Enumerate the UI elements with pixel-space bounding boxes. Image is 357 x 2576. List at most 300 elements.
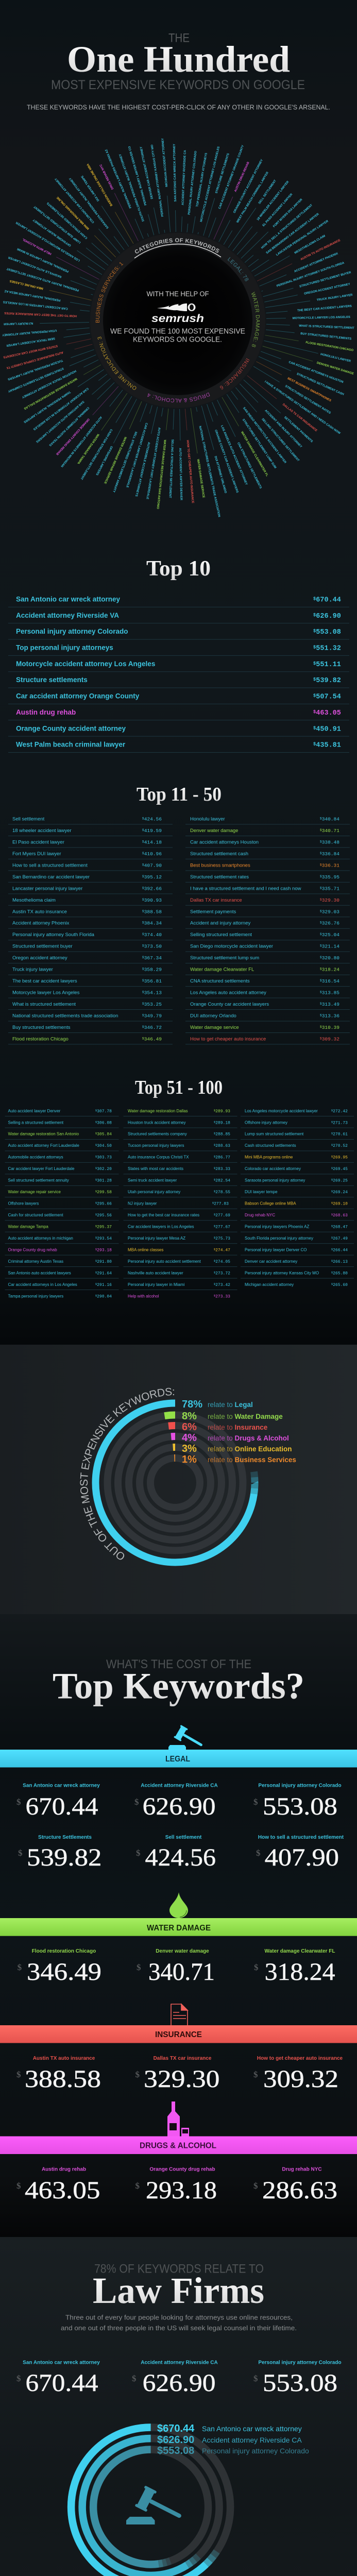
- water damage stats: Water damage Clearwater FL: [265, 1948, 335, 1954]
- water damage stats: 346.49: [27, 1958, 101, 1986]
- category ring labels: DRUGS & ALCOHOL: 4: [147, 393, 210, 403]
- chart legend: relate to Business Services: [208, 1456, 296, 1464]
- chart legend: 1%: [182, 1454, 197, 1465]
- column one, ranks 11 to 30: $353.25: [142, 1002, 162, 1007]
- legal stats: 553.08: [263, 1793, 337, 1820]
- column two, ranks 31 to 50: $340.84: [320, 816, 339, 822]
- legal stats: 626.90: [143, 1793, 216, 1820]
- column three, ranks 85 to 100: Cash structured settlements: [245, 1143, 296, 1148]
- radial keywords: THE BEST CAR ACCIDENT LAWYERS: [297, 305, 352, 313]
- band label: insurance: INSURANCE: [155, 2030, 202, 2039]
- radial keywords: DUI ATTORNEY ORLANDO: [214, 456, 227, 494]
- column two, ranks 31 to 50: Denver water damage: [190, 828, 238, 834]
- radial keywords: MBA ONLINE CLASSES: [9, 279, 44, 290]
- ring legend: Personal injury attorney Colorado: [202, 2447, 309, 2455]
- column two, ranks 68 to 84: States with most car accidents: [128, 1166, 183, 1171]
- column three, ranks 85 to 100: $268.47: [331, 1225, 348, 1229]
- insurance stats: $: [16, 2070, 21, 2079]
- column three, ranks 85 to 100: $269.95: [331, 1156, 348, 1160]
- table: top 11 to 50: [12, 784, 339, 1045]
- ring legend: $626.90: [157, 2434, 194, 2446]
- column two, ranks 68 to 84: [128, 1109, 230, 1299]
- drugs and alcohol stats: 286.63: [262, 2177, 337, 2204]
- column one, ranks 51 to 67: $301.28: [95, 1179, 112, 1183]
- top law keyword stats: Personal injury attorney Colorado: [258, 2360, 342, 2366]
- radial keywords: PERSONAL INJURY LAWYER MESA AZ: [4, 289, 61, 301]
- radial keywords: UTAH PERSONAL INJURY ATTORNEY: [2, 329, 57, 336]
- radial keywords: MOTORCYCLE ACCIDENT ATTORNEY LOS ANGELES: [200, 146, 220, 223]
- column one, ranks 11 to 30: $367.34: [142, 955, 162, 961]
- subheading: MOST EXPENSIVE KEYWORDS ON GOOGLE: [51, 78, 305, 92]
- top 10 rows: $626.90: [313, 613, 341, 620]
- radial keywords: ACCIDENT ATTORNEY RIVERSIDE CA: [181, 149, 187, 206]
- column one, ranks 11 to 30: $424.56: [142, 816, 162, 822]
- column three, ranks 85 to 100: $270.61: [331, 1132, 348, 1137]
- band label: legal: LEGAL: [165, 1755, 190, 1764]
- radial keywords: CAR ACCIDENT LAWYERS IN LOS ANGELES: [3, 300, 68, 310]
- drugs and alcohol stats: $: [16, 2181, 21, 2191]
- radial keywords: ORANGE COUNTY ACCIDENT ATTORNEY: [233, 159, 264, 214]
- column three, ranks 85 to 100: DUI lawyer tempe: [245, 1190, 278, 1194]
- column one, ranks 11 to 30: $390.93: [142, 897, 162, 903]
- column two, ranks 31 to 50: Water damage service: [190, 1025, 239, 1030]
- radial keywords: HOW TO SELL A STRUCTURED SETTLEMENT: [261, 204, 313, 250]
- radial keywords: SETTLEMENT PAYMENTS: [283, 416, 313, 444]
- column one, ranks 11 to 30: $354.13: [142, 990, 162, 996]
- radial keywords: MINI MBA PROGRAMS ONLINE: [56, 196, 90, 230]
- column two, ranks 68 to 84: Personal injury lawyer in Miami: [128, 1282, 184, 1287]
- band: legal: [0, 1750, 357, 1767]
- radial keywords: 18 WHEELER ACCIDENT LAWYER: [257, 180, 290, 222]
- radial keywords: TRUCK INJURY LAWYER: [316, 294, 353, 302]
- column one, ranks 51 to 67: Tampa personal injury lawyers: [8, 1294, 63, 1298]
- radial keywords: WATER DAMAGE CLEARWATER FL: [240, 431, 268, 478]
- radial keywords: STATES WITH MOST CAR ACCIDENTS: [3, 344, 58, 359]
- column two, ranks 68 to 84: $288.63: [214, 1144, 230, 1148]
- legal stats: $: [256, 1848, 261, 1858]
- radial keywords: [2, 138, 354, 517]
- category ring labels: LEGAL: 78: [228, 257, 248, 281]
- top 10 rows: $450.91: [313, 725, 341, 733]
- top 10 rows: $463.05: [313, 709, 341, 717]
- column one, ranks 51 to 67: $291.16: [95, 1283, 112, 1287]
- radial keywords: TAMPA PERSONAL INJURY LAWYERS: [23, 390, 71, 423]
- radial keywords: SOUTH FLORIDA PERSONAL INJURY ATTORNEY: [119, 154, 145, 222]
- radial keywords: TOP PERSONAL INJURY ATTORNEYS: [196, 152, 208, 207]
- chart legend: relate to Drugs & Alcohol: [208, 1434, 289, 1442]
- radial keywords: CASH FOR STRUCTURED SETTLEMENT: [79, 428, 113, 480]
- drugs and alcohol stats: Orange County drug rehab: [149, 2167, 215, 2172]
- category ring labels: ONLINE EDUCATION: 3: [98, 337, 136, 390]
- column one, ranks 51 to 67: Cash for structured settlement: [8, 1213, 63, 1217]
- radial keywords: WEST PALM BEACH CRIMINAL LAWYER: [236, 171, 269, 224]
- column two, ranks 68 to 84: $289.18: [214, 1121, 230, 1125]
- legal stats: $: [134, 1797, 139, 1807]
- radial keywords: LUMP SUM STRUCTURED SETTLEMENT: [33, 205, 81, 244]
- radial keywords: NJ INJURY LAWYER: [3, 321, 33, 325]
- radial keywords: STRUCTURED SETTLEMENTS COMPANY: [7, 366, 64, 393]
- radial keywords: SEMI TRUCK ACCIDENT LAWYER: [6, 336, 55, 347]
- radial keywords: COLORADO CAR ACCIDENT ATTORNEY: [55, 177, 95, 224]
- radial keywords: WATER DAMAGE REPAIR SERVICE: [103, 436, 127, 484]
- section overline: WHAT'S THE COST OF THE: [106, 1657, 251, 1671]
- column two, ranks 31 to 50: San Diego motorcycle accident lawyer: [190, 944, 273, 950]
- section overline: 78% OF KEYWORDS RELATE TO: [94, 2262, 264, 2276]
- coloured ring arcs: [96, 1403, 254, 1562]
- band: water damage: [0, 1918, 357, 1936]
- column one, ranks 51 to 67: $293.18: [95, 1248, 112, 1252]
- column two, ranks 68 to 84: $288.85: [214, 1132, 230, 1137]
- column one, ranks 11 to 30: Oregon accident attorney: [12, 955, 67, 961]
- column one, ranks 51 to 67: Sell structured settlement annuity: [8, 1178, 69, 1183]
- radial keywords: OFFSHORE LAWYERS: [95, 445, 113, 476]
- column one, ranks 51 to 67: $306.08: [95, 1121, 112, 1125]
- top 10 rows: Orange County accident attorney: [16, 724, 126, 732]
- water damage stats: $: [137, 1962, 141, 1972]
- water damage stats: Denver water damage: [156, 1948, 209, 1954]
- column one, ranks 51 to 67: $305.84: [95, 1132, 112, 1137]
- insurance stats: 388.58: [25, 2065, 101, 2093]
- column one, ranks 51 to 67: $295.66: [95, 1202, 112, 1207]
- radial keywords: SELLING A STRUCTURED SETTLEMENT: [168, 439, 174, 498]
- column two, ranks 68 to 84: Houston truck accident attorney: [128, 1120, 186, 1125]
- radial keywords: PERSONAL INJURY LAWYER IN MIAMI: [16, 247, 70, 273]
- top law keyword stats: [16, 2360, 342, 2397]
- column two, ranks 31 to 50: $310.39: [320, 1025, 339, 1030]
- column two, ranks 31 to 50: Selling structured settlement: [190, 932, 252, 938]
- column three, ranks 85 to 100: Babson College online MBA: [245, 1201, 296, 1206]
- ring legend: $553.08: [157, 2445, 194, 2456]
- top 10 rows: Car accident attorney Orange County: [16, 692, 140, 700]
- water damage stats: $: [254, 1962, 259, 1972]
- column three, ranks 85 to 100: $269.10: [331, 1202, 348, 1207]
- chart legend: [182, 1399, 296, 1465]
- column two, ranks 31 to 50: Settlement payments: [190, 909, 236, 914]
- centre text: found keywords: WE FOUND THE 100 MOST EXPENSIVE: [110, 327, 245, 336]
- radial keywords: TUCSON PERSONAL INJURY LAWYERS: [7, 359, 63, 381]
- chart legend: relate to Legal: [208, 1401, 253, 1409]
- top law keyword stats: 626.90: [143, 2369, 216, 2397]
- column two, ranks 31 to 50: $335.71: [320, 886, 339, 891]
- column two, ranks 31 to 50: $338.48: [320, 839, 339, 845]
- radial keywords: I HAVE A STRUCTURED SETTLEMENT AND I NEED CASH NOW: [264, 380, 341, 435]
- column three, ranks 85 to 100: $269.24: [331, 1190, 348, 1195]
- legal stats: 670.44: [26, 1793, 98, 1820]
- top 10 rows: $670.44: [313, 596, 341, 604]
- column one, ranks 11 to 30: $358.29: [142, 967, 162, 973]
- column one, ranks 51 to 67: $302.20: [95, 1167, 112, 1172]
- legal stats: San Antonio car wreck attorney: [23, 1783, 100, 1789]
- top 10 rows: Motorcycle accident attorney Los Angeles: [16, 660, 155, 668]
- radial keywords: AUTO INSURANCE CORPUS CHRISTI TX: [6, 350, 63, 369]
- column one, ranks 51 to 67: Car accident lawyer Fort Lauderdale: [8, 1166, 75, 1171]
- column three, ranks 85 to 100: $271.73: [331, 1121, 348, 1125]
- column one, ranks 11 to 30: Austin TX auto insurance: [12, 909, 67, 914]
- column two, ranks 68 to 84: $277.67: [214, 1225, 230, 1229]
- column two, ranks 31 to 50: Los Angeles auto accident attorney: [190, 990, 266, 996]
- table: top 51 to 100: [8, 1077, 348, 1301]
- chart legend: 4%: [182, 1432, 197, 1444]
- column three, ranks 85 to 100: $266.13: [331, 1260, 348, 1264]
- column two, ranks 68 to 84: $277.69: [214, 1213, 230, 1218]
- radial keywords: DRUG REHAB NYC: [99, 163, 114, 190]
- column two, ranks 68 to 84: MBA online classes: [128, 1247, 163, 1252]
- column two, ranks 68 to 84: Water damage restoration Dallas: [128, 1109, 188, 1113]
- column two, ranks 68 to 84: Personal injury lawyer Mesa AZ: [128, 1236, 185, 1241]
- top 10 rows: $539.82: [313, 677, 341, 685]
- radial keywords: PERSONAL INJURY ATTORNEY COLORADO: [188, 150, 198, 215]
- column two, ranks 31 to 50: $320.80: [320, 955, 339, 961]
- column one, ranks 11 to 30: San Bernardino car accident lawyer: [12, 874, 90, 880]
- radial keywords: WHAT IS STRUCTURED SETTLEMENT: [299, 325, 354, 330]
- insurance stats: Dallas TX car insurance: [154, 2056, 212, 2061]
- column three, ranks 85 to 100: Denver car accident attorney: [245, 1259, 297, 1264]
- curved ring caption: OUT OF THE MOST EXPENSIVE KEYWORDS:: [80, 1388, 174, 1560]
- legal stats: $: [18, 1848, 23, 1858]
- column two, ranks 31 to 50: Best business smartphones: [190, 862, 250, 868]
- column two, ranks 31 to 50: Orange County car accident lawyers: [190, 1002, 269, 1007]
- column one, ranks 11 to 30: $388.58: [142, 909, 162, 914]
- radial keywords: WATER DAMAGE RESTORATION SAN ANTONIO: [156, 439, 166, 510]
- centre logo: semrush: semrush: [151, 313, 204, 325]
- drugs and alcohol stats: 463.05: [25, 2177, 100, 2204]
- category ring labels: WATER DAMAGE: 8: [251, 292, 260, 347]
- column two, ranks 31 to 50: How to get cheaper auto insurance: [190, 1036, 266, 1042]
- top 10 rows: $551.11: [313, 661, 341, 669]
- radial keywords: LOS ANGELES MOTORCYCLE ACCIDENT LAWYER: [15, 221, 80, 262]
- column three, ranks 85 to 100: Lump sum structured settlement: [245, 1132, 304, 1137]
- radial keywords: PERSONAL INJURY ATTORNEY SOUTH FLORIDA: [276, 261, 345, 288]
- column two, ranks 31 to 50: $325.04: [320, 932, 339, 938]
- column one, ranks 11 to 30: Truck injury lawyer: [12, 967, 53, 973]
- paragraph: [61, 2313, 297, 2332]
- radial keywords: HONOLULU LAWYER: [320, 353, 351, 363]
- water damage stats: 318.24: [265, 1958, 335, 1986]
- radial keywords: SAN ANTONIO CAR WRECK ATTORNEY: [173, 144, 177, 202]
- top law keyword stats: 553.08: [263, 2369, 337, 2397]
- column one, ranks 51 to 67: $295.56: [95, 1213, 112, 1218]
- heading: one hundred: One Hundred: [67, 39, 290, 80]
- column one, ranks 11 to 30: $346.49: [142, 1036, 162, 1042]
- column two, ranks 31 to 50: Structured settlement rates: [190, 874, 249, 880]
- ring legend: $670.44: [157, 2423, 195, 2434]
- column one, ranks 11 to 30: National structured settlements trade association: [12, 1013, 118, 1019]
- radial keywords: MESOTHELIOMA CLAIM: [294, 234, 326, 255]
- drugs and alcohol stats: $: [253, 2181, 258, 2191]
- column one, ranks 51 to 67: $307.78: [95, 1109, 112, 1114]
- column one, ranks 51 to 67: Water damage repair service: [8, 1190, 61, 1194]
- column two, ranks 68 to 84: How to get the best car insurance rates: [128, 1213, 199, 1217]
- column one, ranks 51 to 67: Automobile accident attorneys: [8, 1155, 63, 1160]
- column one, ranks 11 to 30: $410.96: [142, 851, 162, 857]
- column two, ranks 68 to 84: $273.72: [214, 1271, 230, 1276]
- radial keywords: SELLING STRUCTURED SETTLEMENT: [261, 418, 300, 462]
- column one, ranks 11 to 30: The best car accident lawyers: [12, 978, 77, 984]
- column one, ranks 11 to 30: $395.12: [142, 874, 162, 880]
- chart legend: relate to Insurance: [208, 1423, 268, 1431]
- column one, ranks 11 to 30: Lancaster personal injury lawyer: [12, 886, 82, 891]
- radial keywords: CRIMINAL ATTORNEY AUSTIN TEXAS: [48, 406, 90, 447]
- table: top 10: [16, 557, 341, 753]
- column one, ranks 11 to 30: Structured settlement buyer: [12, 944, 73, 950]
- column one, ranks 11 to 30: $414.18: [142, 839, 162, 845]
- icon: gavel: [168, 1725, 206, 1752]
- radial keywords: CNA STRUCTURED SETTLEMENTS: [236, 442, 262, 489]
- category ring labels: CATEGORIES OF KEYWORDS: [135, 238, 219, 253]
- column two, ranks 68 to 84: $289.93: [214, 1109, 230, 1114]
- column two, ranks 31 to 50: $321.14: [320, 944, 339, 950]
- column one, ranks 51 to 67: $295.37: [95, 1225, 112, 1229]
- column one, ranks 51 to 67: [8, 1109, 112, 1299]
- top 10 rows: $435.81: [313, 741, 341, 750]
- radial keywords: CASH STRUCTURED SETTLEMENTS: [46, 201, 88, 240]
- column three, ranks 85 to 100: Drug rehab NYC: [245, 1213, 275, 1217]
- legal stats: Sell settlement: [165, 1835, 202, 1840]
- column three, ranks 85 to 100: Michigan accident attorney: [245, 1282, 294, 1287]
- radial keywords: DUI LAWYER TEMPE: [81, 175, 100, 201]
- top law keyword stats: Accident attorney Riverside CA: [141, 2360, 218, 2366]
- chart: radial keyword categories: [2, 138, 354, 517]
- radial keywords: LOS ANGELES AUTO ACCIDENT ATTORNEY: [220, 425, 248, 486]
- column two, ranks 68 to 84: $286.77: [214, 1156, 230, 1160]
- icon: insurance document: [171, 2004, 188, 2025]
- column two, ranks 31 to 50: CNA structured settlements: [190, 978, 250, 984]
- column two, ranks 68 to 84: Structured settlements company: [128, 1132, 187, 1137]
- top law keyword stats: $: [16, 2374, 21, 2383]
- white arc under categories title: [134, 244, 221, 258]
- column one, ranks 11 to 30: El Paso accident lawyer: [12, 839, 64, 845]
- radial keywords: STRUCTURED SETTLEMENT LUMP SUM: [242, 418, 277, 469]
- column one, ranks 11 to 30: How to sell a structured settlement: [12, 862, 88, 868]
- column three, ranks 85 to 100: $266.44: [331, 1248, 348, 1252]
- radial keywords: MICHIGAN ACCIDENT ATTORNEY: [161, 138, 168, 187]
- radial keywords: FLOOD RESTORATION CHICAGO: [305, 341, 354, 352]
- column three, ranks 85 to 100: Personal injury lawyers Phoenix AZ: [245, 1224, 310, 1229]
- column one, ranks 11 to 30: $392.66: [142, 886, 162, 891]
- radial keywords: SELL SETTLEMENT: [258, 179, 277, 205]
- radial keywords: NASHVILLE AUTO ACCIDENT LAWYER: [8, 256, 62, 278]
- radial keywords: MOTORCYCLE LAWYER LOS ANGELES: [293, 316, 350, 320]
- chart legend: relate to Online Education: [208, 1445, 292, 1453]
- drugs and alcohol stats: 293.18: [146, 2177, 217, 2204]
- column three, ranks 85 to 100: Sarasota personal injury attorney: [245, 1178, 305, 1183]
- radial keywords: WATER DAMAGE SERVICE: [196, 459, 205, 498]
- column two, ranks 31 to 50: Water damage Clearwater FL: [190, 967, 254, 973]
- legal stats: $: [136, 1848, 141, 1858]
- panel: intro and keyword lists background: [0, 0, 357, 1345]
- column one, ranks 11 to 30: [12, 816, 162, 1042]
- top 10 rows: Accident attorney Riverside VA: [16, 612, 119, 619]
- column two, ranks 31 to 50: $318.24: [320, 967, 339, 973]
- top law keyword stats: 670.44: [26, 2369, 98, 2397]
- top law keyword stats: $: [132, 2374, 137, 2383]
- legal stats: $: [16, 1797, 21, 1807]
- chart legend: 78%: [182, 1399, 202, 1410]
- column two, ranks 31 to 50: Car accident attorneys Houston: [190, 839, 259, 845]
- radial keywords: STRUCTURED SETTLEMENT BUYER: [299, 271, 352, 289]
- ring legend: Accident attorney Riverside CA: [202, 2436, 302, 2444]
- column two, ranks 68 to 84: Auto insurance Corpus Christi TX: [128, 1155, 189, 1160]
- insurance stats: 329.30: [144, 2065, 219, 2093]
- column two, ranks 68 to 84: $278.55: [214, 1190, 230, 1195]
- column three, ranks 85 to 100: $265.60: [331, 1283, 348, 1287]
- column one, ranks 51 to 67: $290.04: [95, 1294, 112, 1299]
- column one, ranks 11 to 30: $407.90: [142, 862, 162, 868]
- column one, ranks 11 to 30: $374.40: [142, 932, 162, 938]
- column one, ranks 51 to 67: Criminal attorney Austin Texas: [8, 1259, 63, 1264]
- column two, ranks 31 to 50: Structured settlement lump sum: [190, 955, 259, 961]
- column two, ranks 68 to 84: $274.05: [214, 1260, 230, 1264]
- legal stats: Accident attorney Riverside CA: [141, 1783, 218, 1789]
- radial keywords: HOW TO GET CHEAPER AUTO INSURANCE: [186, 440, 194, 503]
- column one, ranks 51 to 67: Auto accident attorney Fort Lauderdale: [8, 1143, 79, 1148]
- column two, ranks 31 to 50: Honolulu lawyer: [190, 816, 225, 822]
- water damage stats: Flood restoration Chicago: [32, 1948, 96, 1954]
- column three, ranks 85 to 100: $265.80: [331, 1271, 348, 1276]
- legal stats: 407.90: [265, 1844, 339, 1871]
- drugs and alcohol stats: Drug rehab NYC: [282, 2167, 322, 2172]
- column one, ranks 51 to 67: $303.73: [95, 1156, 112, 1160]
- legal stats: [16, 1783, 344, 1871]
- insurance stats: $: [135, 2070, 140, 2079]
- chart legend: 6%: [182, 1421, 197, 1433]
- radial keywords: AUTOMOBILE ACCIDENT ATTORNEYS: [134, 442, 150, 497]
- column three, ranks 85 to 100: Offshore injury attorney: [245, 1120, 287, 1125]
- column two, ranks 31 to 50: $313.85: [320, 990, 339, 996]
- column two, ranks 31 to 50: $329.30: [320, 897, 339, 903]
- band label: drugs and alcohol: DRUGS & ALCOHOL: [140, 2141, 216, 2150]
- radial keywords: SARASOTA PERSONAL INJURY ATTORNEY: [69, 177, 110, 229]
- drugs and alcohol stats: Austin drug rehab: [42, 2167, 86, 2172]
- radial keywords: HOW TO GET THE BEST CAR INSURANCE RATES: [4, 311, 77, 317]
- column one, ranks 11 to 30: Mesothelioma claim: [12, 897, 56, 903]
- radial keywords: SAN BERNARDINO CAR ACCIDENT LAWYER: [266, 213, 320, 255]
- column one, ranks 11 to 30: $384.34: [142, 921, 162, 926]
- radial keywords: PERSONAL INJURY AUTO ACCIDENT SETTLEMENT: [6, 267, 79, 292]
- column two, ranks 31 to 50: Dallas TX car insurance: [190, 897, 242, 903]
- top 10 rows: Personal injury attorney Colorado: [16, 628, 128, 635]
- radial keywords: AUSTIN TX AUTO INSURANCE: [300, 239, 341, 261]
- column one, ranks 11 to 30: Personal injury attorney South Florida: [12, 932, 95, 938]
- column three, ranks 85 to 100: Los Angeles motorcycle accident lawyer: [245, 1109, 318, 1113]
- ring background: [90, 233, 265, 408]
- column two, ranks 68 to 84: $283.33: [214, 1167, 230, 1172]
- radial keywords: PERSONAL INJURY ATTORNEY KANSAS CITY MO: [151, 144, 164, 217]
- icon: semrush comet: [157, 303, 196, 311]
- column one, ranks 51 to 67: $291.80: [95, 1260, 112, 1264]
- radial keywords: DALLAS TX CAR INSURANCE: [282, 403, 318, 432]
- column two, ranks 68 to 84: Personal injury auto accident settlement: [128, 1259, 201, 1264]
- column one, ranks 51 to 67: Auto accident lawyer Denver: [8, 1109, 61, 1113]
- radial keywords: CAR ACCIDENT ATTORNEYS IN LOS ANGELES: [32, 387, 89, 431]
- radial keywords: NATIONAL STRUCTURED SETTLEMENTS TRADE ASSOCIATION: [198, 426, 220, 517]
- top 10 rows: $507.54: [313, 693, 341, 701]
- column one, ranks 11 to 30: Accident attorney Phoenix: [12, 921, 70, 926]
- column one, ranks 51 to 67: Offshore lawyers: [8, 1201, 39, 1206]
- heading: top 51 - 100: Top 51 - 100: [135, 1077, 223, 1098]
- column two, ranks 68 to 84: $277.83: [212, 1202, 229, 1207]
- ring legend: [157, 2423, 309, 2456]
- chart legend: relate to Water Damage: [208, 1413, 283, 1420]
- section heading: Law Firms: [93, 2270, 264, 2311]
- column two, ranks 31 to 50: I have a structured settlement and I need cash now: [190, 886, 301, 891]
- radial keywords: OREGON ACCIDENT ATTORNEY: [304, 283, 350, 296]
- legal stats: 539.82: [27, 1844, 102, 1871]
- top 10 rows: [16, 596, 341, 750]
- drugs and alcohol stats: [16, 2167, 337, 2204]
- legal stats: Personal injury attorney Colorado: [258, 1783, 342, 1789]
- radial keywords: WATER DAMAGE RESTORATION DALLAS: [23, 377, 77, 410]
